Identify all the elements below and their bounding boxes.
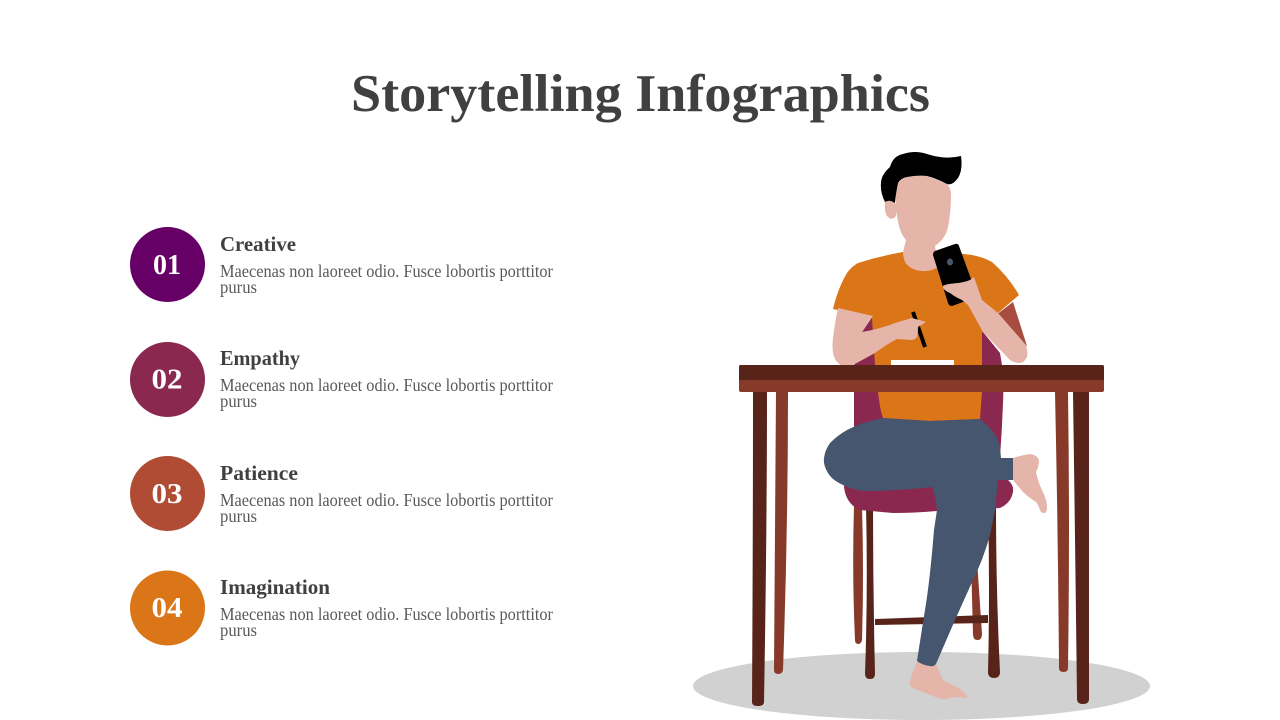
heading: Imagination: Imagination	[220, 575, 330, 599]
description: Patience: Maecenas non laoreet odio. Fusce lobortis porttitor	[220, 490, 553, 510]
description: Creative: purus	[220, 277, 257, 297]
item 04: Imagination	[130, 570, 553, 646]
heading: Patience: Patience	[220, 461, 298, 485]
torso and shirt	[833, 250, 1019, 421]
chair backrest and seat	[844, 317, 1013, 513]
hair	[881, 152, 962, 203]
number badge 02	[130, 342, 205, 417]
item 03: Patience	[130, 456, 553, 531]
number badge 03	[130, 456, 205, 531]
desk legs	[752, 392, 1089, 706]
ear	[885, 198, 897, 219]
number badge 01	[130, 227, 205, 302]
description: Empathy: Maecenas non laoreet odio. Fusce lobortis porttitor	[220, 375, 553, 395]
raised foot	[1013, 454, 1047, 513]
description: Patience: purus	[220, 506, 257, 526]
heading: Empathy: Empathy	[220, 346, 300, 370]
standing foot	[909, 661, 967, 699]
illustration: person at desk	[693, 152, 1150, 720]
item 01: Creative	[130, 227, 553, 302]
phone camera	[947, 258, 953, 266]
number badge 03: 03	[152, 479, 182, 510]
desk top	[739, 365, 1104, 392]
title: Storytelling Infographics	[351, 65, 930, 123]
item 02: Empathy	[130, 342, 553, 417]
paper on desk	[891, 360, 954, 366]
number badge 04: 04	[152, 593, 182, 624]
right arm and hand	[943, 277, 1027, 363]
description: Imagination: Maecenas non laoreet odio. Fusce lobortis porttitor	[220, 604, 553, 624]
neck and face	[896, 176, 951, 271]
pen	[913, 312, 925, 347]
number badge 04	[130, 570, 205, 646]
chair front legs and stretcher	[865, 505, 1000, 679]
heading: Creative: Creative	[220, 232, 296, 256]
description: Empathy: purus	[220, 391, 257, 411]
upper back highlight	[996, 302, 1027, 346]
description: Imagination: purus	[220, 620, 257, 640]
number badge 01: 01	[153, 250, 181, 281]
chair back legs	[853, 505, 982, 644]
floor shadow	[693, 652, 1150, 720]
phone	[933, 244, 975, 306]
description: Creative: Maecenas non laoreet odio. Fusce lobortis porttitor	[220, 261, 553, 281]
number badge 02: 02	[152, 364, 182, 396]
left arm and hand	[832, 308, 926, 365]
trousers	[824, 418, 1013, 666]
